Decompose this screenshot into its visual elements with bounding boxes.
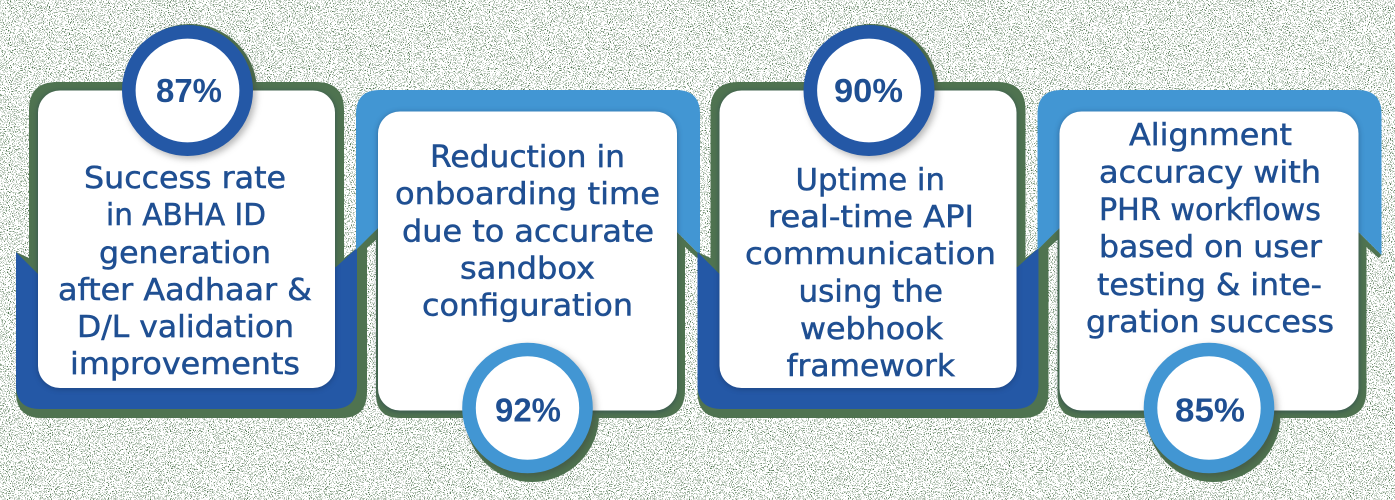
badge: 92%: 92%: [495, 392, 561, 428]
card backing shape: [376, 232, 700, 418]
panel: PHR alignment: [1038, 90, 1382, 482]
text block: Alignment: [1129, 118, 1292, 153]
text block: [58, 161, 312, 382]
text block: [1086, 118, 1334, 340]
badge: 90%: [810, 32, 928, 149]
light blue upper band: [1038, 90, 1382, 255]
dark blue lower band: [698, 248, 1038, 409]
badge halo: [465, 348, 599, 482]
text block: PHR workflows: [1099, 193, 1321, 228]
text block: [745, 163, 996, 384]
text block: framework: [786, 349, 955, 384]
text block: Success rate: [84, 161, 286, 196]
text block: communication: [745, 237, 996, 272]
white card: [1060, 112, 1358, 410]
text block: after Aadhaar &: [58, 273, 312, 308]
badge: 92%: [469, 350, 586, 466]
badge halo: [1146, 348, 1280, 482]
badge: 87%: 87%: [156, 72, 222, 109]
text block: onboarding time: [395, 177, 660, 212]
text block: Uptime in: [796, 163, 945, 198]
white card: [720, 90, 1016, 388]
text block: generation: [99, 236, 271, 271]
dark blue lower band: [16, 248, 357, 409]
text block: real-time API: [768, 200, 974, 235]
panel: onboarding time: [356, 90, 700, 482]
text block: configuration: [422, 288, 633, 324]
text block: using the: [798, 274, 943, 310]
text block: webhook: [800, 312, 943, 347]
badge halo: [123, 24, 257, 158]
badge: 87%: [129, 32, 246, 149]
text block: gration success: [1086, 305, 1334, 340]
text block: [395, 140, 660, 324]
card backing shape: [16, 82, 378, 418]
text block: in ABHA ID: [106, 198, 266, 233]
panel: success rate: [16, 24, 378, 418]
card backing shape: [698, 82, 1060, 418]
light blue upper band: [356, 90, 700, 255]
badge halo: [804, 24, 938, 158]
white card: [378, 112, 677, 410]
badge: 85%: 85%: [1175, 392, 1245, 428]
panel: API uptime: [698, 24, 1060, 418]
text block: accuracy with: [1099, 156, 1321, 190]
badge: 85%: [1150, 350, 1268, 466]
badge: 90%: 90%: [834, 72, 903, 109]
white card: [38, 90, 335, 388]
text block: improvements: [70, 347, 300, 382]
text block: sandbox: [460, 252, 595, 286]
text block: Reduction in: [430, 140, 625, 175]
text block: based on user: [1099, 230, 1322, 265]
card backing shape: [1058, 232, 1382, 418]
text block: due to accurate: [402, 214, 654, 250]
text block: testing & inte-: [1097, 268, 1322, 303]
text block: D/L validation: [77, 310, 294, 345]
